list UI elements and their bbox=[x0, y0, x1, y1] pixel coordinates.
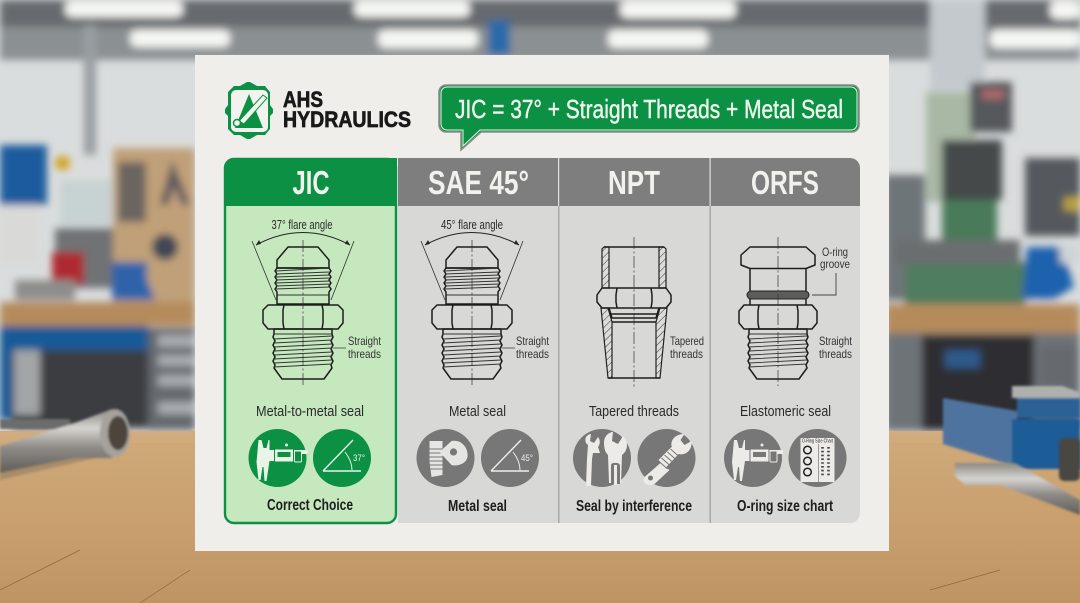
diagram: JIC fitting: threads bbox=[348, 347, 381, 361]
heading: JIC: JIC bbox=[292, 164, 330, 201]
text: ORFS verdict: O-ring size chart bbox=[737, 498, 833, 515]
icon: wrench with spring bbox=[638, 429, 696, 487]
diagram: JIC fitting: Straight bbox=[348, 334, 382, 348]
diagram: ORFS fitting bbox=[739, 237, 853, 386]
table bbox=[0, 431, 1080, 603]
diagram: NPT fitting bbox=[597, 237, 704, 388]
diagram: ORFS fitting: Straight bbox=[819, 334, 853, 348]
text: NPT verdict: Seal by interference bbox=[576, 498, 692, 515]
tool: right wrench bbox=[955, 438, 1080, 515]
diagram: SAE 45 fitting: 45° flare angle bbox=[441, 217, 503, 232]
icon: O-ring size chart bbox=[788, 429, 846, 487]
tool: blue steel block bbox=[943, 386, 1080, 469]
text: ORFS seal type: Elastomeric seal bbox=[740, 403, 831, 420]
logo text: HYDRAULICS bbox=[283, 107, 411, 132]
icon: threaded fitting with eye bbox=[416, 429, 474, 487]
logo text bbox=[283, 87, 411, 132]
text: JIC verdict: Correct Choice bbox=[267, 497, 353, 514]
board bbox=[195, 55, 889, 551]
panel: grey comparison columns bbox=[398, 158, 860, 523]
text: SAE seal type: Metal seal bbox=[449, 403, 506, 420]
diagram: ORFS fitting: groove bbox=[820, 257, 850, 271]
diagram: JIC fitting: 37° flare angle bbox=[272, 217, 332, 232]
heading: ORFS: ORFS bbox=[751, 164, 819, 201]
logo: AHS Hydraulics bbox=[225, 82, 411, 139]
heading: SAE 45: SAE 45° bbox=[428, 164, 529, 201]
icon: 37 degree angle: 37° bbox=[353, 453, 365, 464]
icon: O-ring size chart: O-Ring Size Chart bbox=[802, 438, 833, 444]
icon: caliper green bbox=[248, 429, 308, 487]
text: JIC seal type: Metal-to-metal seal bbox=[256, 403, 364, 420]
diagram: SAE 45 fitting: Straight bbox=[516, 334, 550, 348]
left machinery bbox=[0, 145, 47, 205]
diagram: NPT fitting: threads bbox=[670, 347, 703, 361]
diagram: ORFS fitting: O-ring bbox=[822, 245, 848, 259]
diagram: NPT fitting: Tapered bbox=[670, 334, 704, 348]
heading: NPT: NPT bbox=[608, 164, 660, 201]
callout: key formula: JIC = 37° + Straight Threads + Metal Seal bbox=[455, 94, 843, 124]
icon: 45 degree angle bbox=[481, 429, 539, 487]
icon: 37 degree angle bbox=[313, 429, 371, 487]
diagram: ORFS fitting: threads bbox=[819, 347, 852, 361]
diagram: SAE 45 fitting bbox=[421, 217, 550, 386]
icon: caliper grey bbox=[724, 429, 783, 487]
logo text: AHS bbox=[283, 87, 323, 112]
callout: key formula bbox=[439, 85, 859, 150]
text: NPT seal type: Tapered threads bbox=[589, 403, 679, 420]
icon: 45 degree angle: 45° bbox=[521, 453, 533, 464]
panel: JIC column bbox=[224, 158, 397, 523]
diagram: SAE 45 fitting: threads bbox=[516, 347, 549, 361]
text: SAE verdict: Metal seal bbox=[448, 498, 507, 515]
icon: hydraulic cylinder badge bbox=[225, 82, 273, 139]
right machinery bbox=[885, 175, 925, 300]
tool: left wrench bbox=[0, 409, 130, 480]
diagram: JIC fitting bbox=[252, 217, 382, 386]
icon: two wrenches bbox=[573, 429, 631, 487]
